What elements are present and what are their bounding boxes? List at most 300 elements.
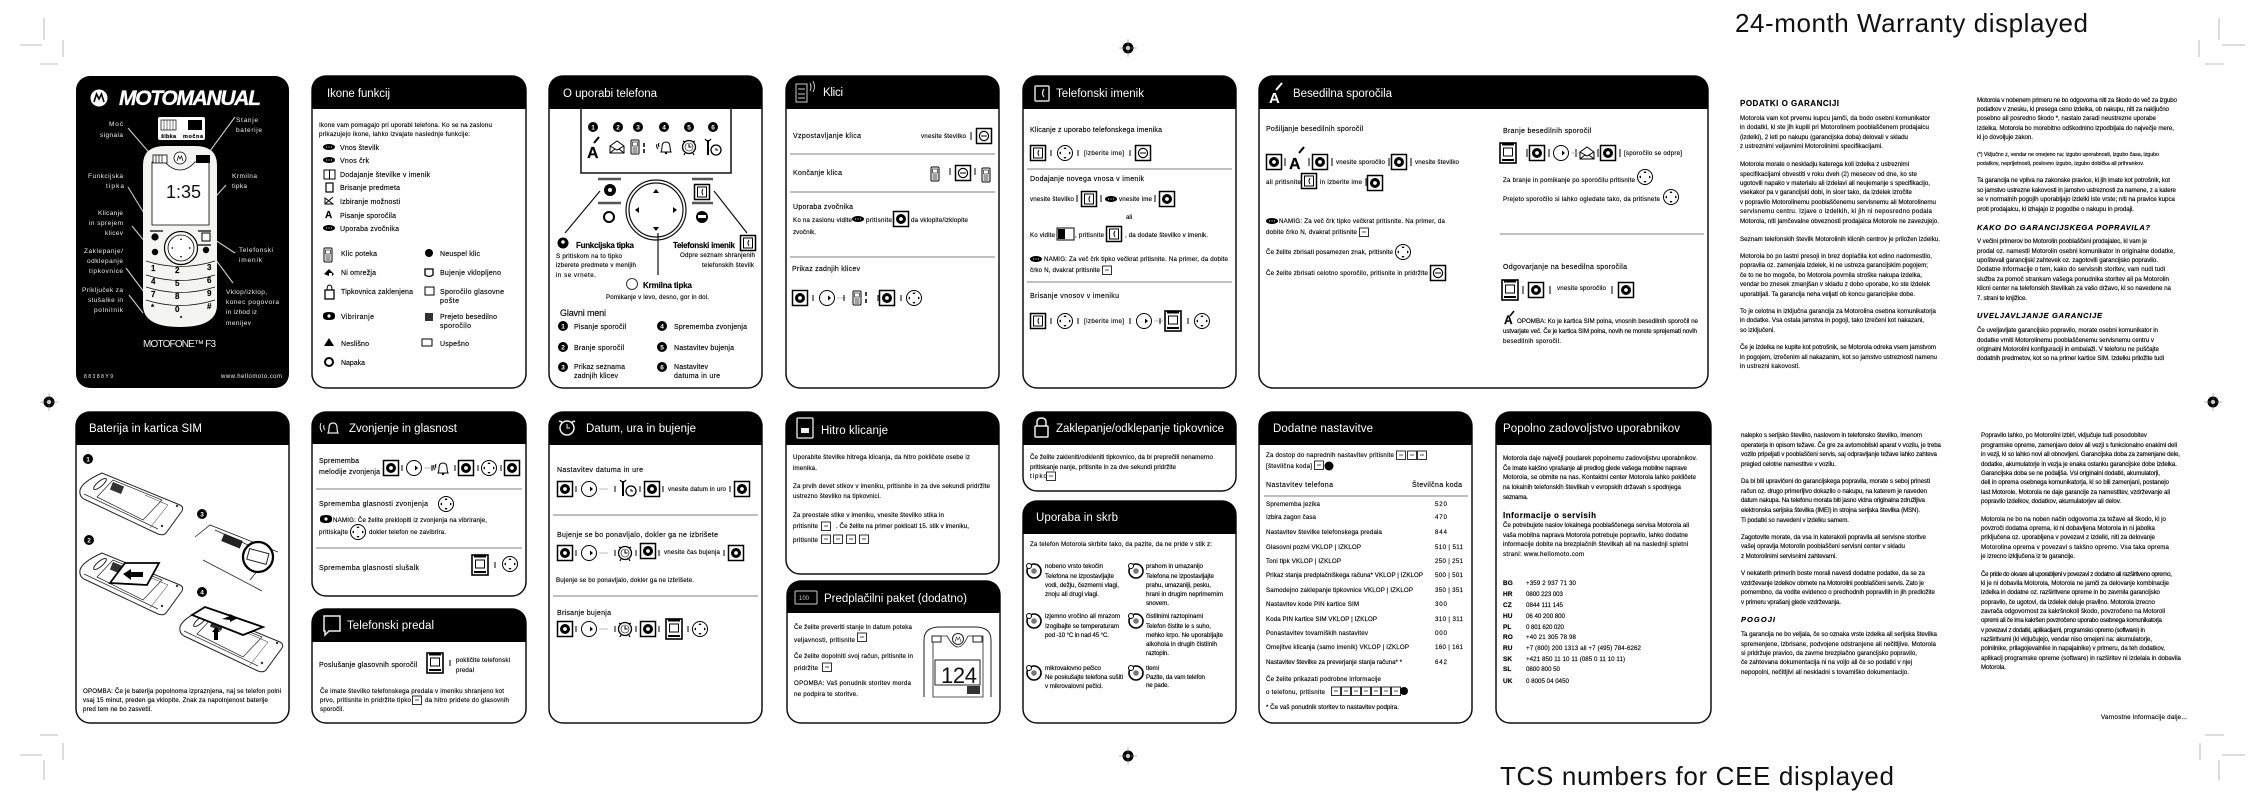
status icons: Ni omrežja [341, 270, 376, 277]
phone number list: 0800 800 50 [1526, 666, 1561, 673]
row: speaker: da vklopite/izklopite [911, 217, 969, 224]
callout labels: konec pogovora [226, 299, 279, 306]
icon list: Dodajanje številke v imenik [340, 172, 430, 179]
warranty text, third column [1741, 432, 1942, 676]
instructions: Za prvih devet stikov v imeniku, pritisnite in za dve sekundi pridržite [793, 483, 991, 490]
Glavni meni: zadnjih klicev [574, 373, 618, 380]
warranty text, fourth column: Popravilo lahko, po Motorolini izbiri, vključuje tudi posodobitev [1981, 432, 2148, 439]
row: alarm: Bujenje se bo ponavljalo, dokler ga ne izbrišete [557, 532, 718, 539]
row: recent calls: Prikaz zadnjih klicev [792, 266, 860, 273]
key descriptions: in se vrnete. [556, 272, 596, 279]
icon list: Brisanje predmeta [340, 185, 400, 192]
phone number list: RU [1503, 645, 1513, 652]
warning: OPOMBA: Če je baterija popolnoma izpraznjena, naj se telefon polni [83, 688, 281, 695]
row: add entry: Ko vidite [1030, 232, 1056, 239]
warning items right: čistilnimi raztopinami [1146, 613, 1203, 620]
phone illustration: 7 [151, 290, 156, 299]
instructions: pritisnite [793, 523, 819, 530]
warranty text, first column: Motorola, niti jamčevalne obveznosti prodajalca Motorole ne zavezujejo. [1740, 218, 1939, 225]
footer: 88388Y9 [84, 374, 113, 380]
row: speaker: pritisnite [866, 217, 893, 224]
row: ring volume: Sprememba glasnosti zvonjenja [319, 501, 428, 508]
phone number list: 0 801 620 020 [1526, 624, 1565, 631]
warranty text, fourth column: v povezavi z dodatki, aplikacijami, programsko opremo (software) in [1981, 627, 2146, 634]
row: ring volume [319, 496, 487, 540]
icon: bell [320, 423, 338, 433]
settings table: 642 [1435, 659, 1448, 666]
Glavni meni: Pisanje sporočil [574, 324, 626, 331]
Glavni meni: Prikaz seznama [574, 364, 625, 371]
block: tips: Če želite zbrisati celotno sporočilo, pritisnite in pridržite [1266, 270, 1429, 277]
phone illustration: 4 [151, 277, 156, 286]
intro [319, 122, 493, 138]
warranty text, first column: so izključeni. [1740, 327, 1775, 334]
block: reading: Prejeto sporočilo si lahko ogledate tako, da pritisnete [1503, 196, 1661, 203]
intro: na lokalnih telefonskih številkah v evropskih državah s spodnjega [1503, 484, 1682, 491]
warranty text, second column: dodatke vrniti Motorolinemu pooblaščenemu servisnemu centru v [1977, 337, 2155, 344]
intro [1503, 455, 1697, 501]
voicemail text: Poslušanje glasovnih sporočil [319, 662, 417, 669]
Glavni meni: 4 [660, 324, 664, 330]
phone number list: 0 8005 04 0450 [1526, 678, 1570, 685]
row: add entry: NAMIG: Za več črk tipko večkrat pritisnite. Na primer, da dobite [1044, 256, 1229, 263]
callout labels: in sprejem [89, 220, 123, 227]
navigation keypad [565, 179, 747, 275]
settings table: 500 | 501 [1435, 572, 1464, 579]
row: placing a call: vnesite številko [921, 133, 967, 140]
warranty text, second column: dodatnih predmetov, kot so na primer kartice SIM. Izdelku priložite tudi [1977, 355, 2164, 362]
warranty text, fourth column: ki je ni dobavila Motorola, Motorola ne jamči za delovanje kombinacije [1981, 580, 2170, 587]
icon: phone ringing [796, 81, 814, 102]
warranty text, fourth column: popravilo izdelkov, dodatkov, akumulatorjev ali delov. [1981, 498, 2121, 505]
warning items right: mehko krpo. Ne uporabljajte [1146, 632, 1224, 639]
phone number list: +7 (800) 200 1313 ali +7 (495) 784-6262 [1526, 645, 1642, 652]
Glavni meni: Nastavitev bujenja [674, 345, 734, 352]
phone illustration: 8 [175, 292, 180, 301]
row: delete alarm [557, 610, 708, 639]
warranty text, fourth column: Če pride do okvare ali uporabljeni v povezavi z dodatno ali razširitveno opremo, [1981, 571, 2172, 578]
status icons: Uspešno [440, 341, 469, 348]
row: recent calls [792, 266, 922, 306]
warranty text, fourth column: dodatke, akumulatorje in vezja je enaka ostanku garancijske dobe izdelka. [1981, 461, 2177, 468]
warranty text, second column: izdelka. Motorola bo morebitno odškodnino izpodbijala do največje mere, [1977, 125, 2174, 132]
block: reading [1500, 128, 1682, 204]
warranty text, fourth column: zavrača odgovornost za kakršnokoli škodo, povzročeno na Motoroli [1981, 608, 2165, 615]
icon list [323, 144, 430, 233]
warranty text, third column: nepopolni, nečitljivi ali neskladni s tovarniško dokumentacijo. [1741, 669, 1909, 676]
phone number list: SK [1503, 656, 1512, 663]
key descriptions: Telefonski imenik [673, 241, 736, 250]
block: tips: Če želite zbrisati posamezen znak, pritisnite [1266, 249, 1394, 256]
heading: Dodatne nastavitve [1273, 423, 1373, 435]
warning [83, 688, 281, 713]
warranty text, third column: Ta garancija ne bo veljala, če so oznaka vrste izdelka ali serijska številka [1741, 631, 1938, 638]
warranty text, fourth column: Motorola ne bo na noben način odgovorna za težave ali škodo, ki jo [1981, 516, 2167, 523]
warning items right [1128, 563, 1224, 689]
settings table: 000 [1435, 630, 1448, 637]
warning items right: ne pade. [1146, 682, 1169, 689]
key descriptions: Odpre seznam shranjenih [680, 252, 756, 259]
warranty text, third column: če zahtevana dokumentacija ni na voljo ali če so podatki v njej [1741, 659, 1912, 666]
heading: Datum, ura in bujenje [586, 423, 696, 435]
Glavni meni: 1 [561, 324, 565, 330]
leader lines [126, 117, 235, 313]
icon list: Vnos številk [340, 145, 380, 152]
heading: Uporaba in skrb [1036, 512, 1118, 524]
warranty text, third column: spremenjene, izbrisane, podvojene odstranjene ali nečitljive. Motorola [1741, 641, 1937, 648]
warranty text, second column: podatkov v znesku, ki presega ceno izdelka, ob nakupu, niti za naključno [1977, 106, 2170, 113]
warranty text, first column: v popravilo Motorolinemu pooblaščenemu servisnemu ali Motorolinemu [1740, 199, 1937, 206]
menu screen: 3 [636, 124, 640, 132]
panel: Telefonski imenik [1023, 76, 1236, 388]
warning items left: znoju ali drugi vlagi. [1045, 591, 1099, 598]
warranty text, fourth column: povzroči dodatna oprema, ki ni dobavljena Motorola in ni jabolka [1981, 525, 2156, 532]
warranty text, first column: PODATKI O GARANCIJI [1740, 99, 1839, 108]
row: placing a call: Vzpostavljanje klica [793, 133, 861, 140]
warranty text, second column: Ta garancija ne vpliva na zakonske pravice, ki jih imate kot potrošnik, kot [1977, 177, 2170, 184]
callout labels: baterije [236, 127, 262, 134]
callout labels: klicev [105, 230, 124, 237]
settings table: Omejitve klicanja (samo imenik) VKLOP | IZKLOP [1266, 644, 1409, 651]
warning: vsaj 15 minut, preden ga vklopite. Znak za napolnjenost baterije [83, 697, 269, 704]
warning items right: Pazite, da vam telefon [1146, 674, 1206, 681]
details footer: Če želite prikazati podrobne informacije [1266, 676, 1382, 683]
warranty text, first column: vendar bo znesek zmanjšan v skladu z dobo uporabe, ko ste izdelek [1740, 281, 1931, 288]
menu screen: 4 [662, 124, 666, 132]
Glavni meni [558, 308, 747, 380]
callout labels: Funkcijska [88, 173, 123, 180]
settings table: 300 [1435, 601, 1448, 608]
warranty text, second column: posebno ali posredno škodo *, nastalo zaradi neustrezne uporabe [1977, 115, 2157, 122]
step illustrations: 4 [200, 590, 204, 596]
phone illustration: 3 [207, 263, 212, 272]
heading: Popolno zadovoljstvo uporabnikov [1503, 423, 1680, 435]
status icons: Vibriranje [341, 314, 374, 321]
warranty text, first column: Motorola vam kot prvemu kupcu jamči, da bodo osebni komunikator [1740, 115, 1930, 122]
voicemail text: pokličite telefonski [456, 657, 510, 664]
Glavni meni: datuma in ure [674, 373, 720, 380]
instructions [793, 454, 991, 544]
block: tips [1266, 218, 1446, 280]
settings table: Prikaz stanja predplačniškega računa* VKLOP | IZKLOP [1266, 572, 1423, 579]
service info: strani: www.hellomoto.com [1503, 551, 1584, 558]
warranty text, third column: vašej opravlja Motorolin pooblaščeni servisni center v skladu [1741, 543, 1906, 550]
warranty text, second column: so jamstvo ustrezne kakovosti in jamstvo ustreznosti za namene, z a katere [1977, 187, 2177, 194]
row: delete entry: Brisanje vnosov v imeniku [1030, 293, 1119, 300]
footer: www.hellomoto.com [220, 374, 282, 380]
key descriptions: Krmilna tipka [643, 281, 693, 290]
settings table: Sprememba jezika [1266, 501, 1321, 508]
callout labels: in izhod iz [226, 309, 257, 316]
icon: letter A with pen [1269, 83, 1282, 107]
icon list: Uporaba zvočnika [340, 226, 399, 233]
settings table: Številčna koda [1412, 480, 1462, 489]
Glavni meni: Branje sporočil [574, 345, 624, 352]
warning items left [1026, 563, 1123, 690]
menu screen [581, 109, 731, 173]
block: sending: Pošiljanje besedilnih sporočil [1266, 126, 1363, 133]
warning items left: nobeno vrsto tekočin [1045, 563, 1104, 570]
row: add entry: ali [1126, 214, 1132, 221]
instructions: Uporabite številke hitrega klicanja, da hitro pokličete osebe iz [793, 454, 970, 461]
warning items left: izjemno vročino ali mrazom [1045, 613, 1120, 620]
phone number list [1503, 580, 1642, 685]
intro: Ikone vam pomagajo pri uporabi telefona. Ko se na zaslonu [319, 122, 493, 129]
warranty text, first column: z ustreznimi veljavnimi Motorolinimi specifikacijami. [1740, 143, 1883, 150]
warranty text, fourth column: deli in oprema osebnega komunikatorja, ki so bili zamenjani, postanejo [1981, 479, 2170, 486]
icon: speech bubble [324, 616, 340, 635]
status icons: Neuspel klic [440, 251, 480, 258]
block: sending: vnesite sporočilo [1336, 159, 1386, 166]
phone display illustration [924, 627, 991, 697]
callout labels [82, 117, 279, 327]
Glavni meni: 3 [561, 364, 565, 372]
footer [84, 374, 282, 380]
row: ringtone: Sprememba [319, 458, 359, 465]
callout labels: tipka [232, 183, 247, 190]
phone number list: SL [1503, 666, 1511, 673]
step illustrations: 2 [87, 538, 91, 544]
block: sending: vnesite številko [1415, 159, 1460, 166]
phone illustration: 9 [207, 289, 212, 298]
phone illustration: 0 [175, 305, 180, 314]
step illustrations: 3 [200, 512, 204, 518]
details footer [1266, 676, 1408, 711]
row: speaker [793, 204, 969, 236]
settings table: 250 | 251 [1435, 558, 1464, 565]
warranty text, fourth column: Garancijska doba se ne podaljša. Vsi originalni dodatki, akumulatorji, [1981, 470, 2160, 477]
icon list: Izbiranje možnosti [340, 199, 400, 206]
block: sending [1266, 126, 1460, 190]
icon list: Pisanje sporočila [340, 213, 396, 220]
status icons: Bujenje vklopljeno [440, 270, 501, 277]
block: reading: Branje besedilnih sporočil [1503, 128, 1591, 135]
callout labels: polnilnik [94, 307, 124, 314]
warranty text, second column: Dodatne informacije o tem, kako do servisnih storitev, vam nudi tudi [1977, 266, 2165, 273]
intro: Motorola daje največji poudarek popolnemu zadovoljstvu uporabnikov. [1503, 455, 1697, 462]
warranty text, second column: V večini primerov bo Motorolin pooblaščeni prodajalec, ki vam je [1977, 238, 2148, 245]
warranty text, fourth column: je izrecno izključena iz te garancije. [1980, 553, 2075, 560]
panel: Datum, ura in bujenje [549, 412, 762, 723]
callout labels: Stanje [236, 117, 258, 124]
warning items right: snovem. [1146, 600, 1169, 607]
warranty text, second column: služba za pomoč strankam vašega ponudnika storitev ali pa Motorolin [1977, 276, 2170, 283]
warranty text, first column: Če je izdelka ne kupite kot potrošnik, se Motorola odreka vsem jamstvom [1740, 344, 1936, 351]
settings table: 310 | 311 [1435, 616, 1464, 623]
instructions [794, 624, 914, 698]
callout labels: Vklop/izklop, [226, 289, 267, 296]
voicemail text: predal [456, 667, 474, 674]
warranty text, first column: če to ne bo mogoče, bo Motorola povrnila stroške nakupa izdelka, [1740, 272, 1922, 279]
warning items left: Telefona ne izpostavljajte [1045, 573, 1115, 580]
settings table: Samodejno zaklepanje tipkovnice VKLOP | IZKLOP [1266, 587, 1413, 594]
row: ending a call [793, 166, 990, 182]
block: replying: besedilnih sporočil. [1503, 338, 1561, 345]
step illustrations [80, 454, 283, 672]
warranty text, third column: operaterja in opisom težave. Če gre za avtomobilski aparat v vozilu, je treba [1741, 442, 1942, 449]
instructions: tipko [1030, 473, 1048, 480]
warranty text, third column: si pridržuje pravico, da zavrne brezplačno garancijsko popravilo, [1741, 650, 1917, 657]
settings table: 510 | 511 [1435, 544, 1464, 551]
phone illustration: * [151, 303, 155, 312]
block: replying: vnesite sporočilo [1557, 285, 1607, 292]
phone number list: 06 40 200 800 [1526, 613, 1566, 620]
heading: Telefonski imenik [1056, 88, 1144, 100]
heading: Predplačilni paket (dodatno) [824, 593, 967, 605]
row: ringtone [319, 458, 520, 476]
warranty text, fourth column: last Motorole. Motorola ne daje garancije za namestitev, vzdrževanje ali [1981, 489, 2170, 496]
warranty text, third column: Ti podatki so navedeni v izdelku samem. [1741, 517, 1849, 524]
panel: O uporabi telefona [549, 76, 762, 388]
row: alarm: Bujenje se bo ponavljalo, dokler ga ne izbrišete. [556, 577, 694, 584]
panel: Telefonski predal [312, 609, 526, 723]
row: delete alarm: Brisanje bujenja [557, 610, 611, 617]
settings table: Toni tipk VKLOP | IZKLOP [1266, 558, 1341, 565]
phone number list: HR [1503, 591, 1513, 598]
phone display illustration: 124 [941, 663, 977, 688]
warning items right: prahu, umazaniji, pesku, [1146, 582, 1211, 589]
warning items right: tlemi [1146, 665, 1159, 672]
phone number list: 0844 111 145 [1526, 602, 1564, 609]
warning items left: v mikrovalovni pečici. [1045, 683, 1103, 690]
panel: Zaklepanje/odklepanje tipkovnice [1023, 412, 1236, 491]
warranty text, third column: z Motorolinimi servisnimi zahtevami. [1741, 553, 1837, 560]
menu screen: 2 [616, 124, 620, 132]
warranty text, third column: vzdrževanje izdelkov obrnete na Motorolini pooblaščeni servis. Zato je [1741, 580, 1925, 587]
warranty text, first column: in dodatke. Vsa ostala jamstva in pogoji, tako izrečeni kot nakazani, [1740, 317, 1924, 324]
settings table: 160 | 161 [1435, 644, 1464, 651]
warranty text, second column [1977, 97, 2178, 362]
phone number list: RO [1503, 634, 1513, 641]
Glavni meni: Glavni meni [560, 308, 606, 318]
warranty text, fourth column: programske opreme, zamenjavo delov ali vezji s funkcionalno enakimi deli [1981, 442, 2177, 449]
instructions: imenika. [793, 465, 817, 472]
warning items right: Telefona ne izpostavljajte [1146, 573, 1215, 580]
warranty text, second column: Če uveljavljate garancijsko popravilo, morate osebni komunikator in [1977, 327, 2159, 334]
phone illustration: 1:35 [166, 182, 201, 202]
warning items left: vodi, dežju, čezmerni vlagi, [1045, 582, 1119, 589]
settings table: Nastavitev telefona [1266, 482, 1333, 489]
callout labels: odklepanje [87, 258, 123, 265]
status icons [323, 248, 504, 367]
service info: Informacije o servisih [1503, 511, 1596, 520]
row: add entry: vnesite številko [1030, 196, 1075, 203]
key descriptions: Pomikanje v levo, desno, gor in dol. [606, 294, 709, 301]
settings table: Izbira zagon časa [1266, 514, 1317, 521]
top annotation: warranty: 24-month Warranty displayed [1735, 8, 2088, 38]
block: tips: NAMIG: Za več črk tipko večkrat pritisnite. Na primer, da [1279, 218, 1446, 225]
panel: Dodatne nastavitve [1259, 412, 1472, 723]
panel: MOTOMANUAL cover [76, 76, 289, 388]
settings table: Glasovni pozivi VKLOP | IZKLOP [1266, 544, 1361, 551]
settings table: 844 [1435, 529, 1448, 536]
row: ring volume: dokler telefon ne zavibrira. [369, 529, 446, 536]
phone illustration: # [207, 302, 212, 311]
block: reading: Za branje in pomikanje po sporočilu pritisnite [1503, 177, 1636, 184]
phone number list: +359 2 937 71 30 [1526, 580, 1577, 587]
block: tips: dobite črko N, dvakrat pritisnite [1266, 229, 1358, 236]
key descriptions [556, 236, 756, 301]
settings table: Nastavitev številke za preverjanje stanja računa* * [1266, 659, 1403, 666]
row: add entry: vnesite ime [1119, 196, 1153, 203]
warranty text, first column: Motorola bo po lastni presoji in brez doplačila kot edino nadomestilo, [1740, 253, 1932, 260]
key descriptions: telefonskih številk [702, 262, 755, 269]
phone illustration: 1 [151, 264, 156, 273]
warranty text, second column: upoštevali garancijski zahtevek oz. zagotovili garancijsko popravilo. [1977, 257, 2158, 264]
warning items right: alkohola in drugih čistilnih [1146, 641, 1218, 648]
row: alarm [556, 532, 744, 584]
warranty text, second column: KAKO DO GARANCIJSKEGA POPRAVILA? [1977, 223, 2150, 232]
instructions: ustrezno številko na tipkovnici. [793, 493, 881, 500]
icon: phone [797, 418, 813, 438]
instructions: . Če želite na primer poklicati 15. stik v imeniku, [836, 523, 969, 530]
warranty text, third column: elektronska serijska številka (IMEI) in strojna serijska številka (MSN). [1741, 507, 1920, 514]
warranty text, first column: in dodatki, ki ste jih kupili pri Motorolinem pooblaščenem prodajalcu [1740, 124, 1930, 131]
instructions: pritiskanje nanje, pritisnite in za dve sekundi pridržite [1030, 464, 1177, 471]
warranty text, third column: POGOJI [1741, 615, 1776, 624]
status icons: Klic poteka [341, 251, 377, 258]
row: delete entry [1030, 293, 1210, 331]
row: set date and time: Nastavitev datuma in ure [557, 467, 643, 474]
settings table: Koda PIN kartice SIM VKLOP | IZKLOP [1266, 616, 1377, 623]
panel: Baterija in kartica SIM [76, 412, 289, 723]
heading: Zaklepanje/odklepanje tipkovnice [1056, 423, 1224, 435]
row: set date and time: vnesite datum in uro [668, 486, 727, 493]
menu screen: 6 [711, 124, 715, 132]
status icons: pošte [440, 298, 459, 305]
warranty text, second column: UVELJAVLJANJE GARANCIJE [1977, 311, 2103, 320]
voicemail text: Če imate številko telefonskega predala v imeniku shranjeno kot [320, 688, 504, 695]
settings table: Nastavitev številke telefonskega predala [1266, 529, 1383, 536]
block: replying [1502, 264, 1699, 345]
warranty text, first column: uporabljali. Ta garancija neha veljati ob koncu garancijske dobe. [1740, 291, 1915, 298]
warranty text, third column: račun oz. drugo primerljivo dokazilo o nakupu, na katerem je naveden [1741, 488, 1928, 495]
warranty text, second column: ki jo dovoljuje zakon. [1977, 134, 2033, 141]
row: add entry [1030, 176, 1229, 274]
block: sending: in izberite ime [1320, 179, 1363, 186]
phone number list: 0800 223 003 [1526, 591, 1564, 598]
menu screen: 1 [591, 124, 595, 132]
warranty text, third column: nalepko s serijsko številko, naslovom in telefonsko številko, imenom [1741, 432, 1922, 439]
Glavni meni: 6 [660, 364, 664, 372]
service info: informacije dobite na brezplačnih številkah ali na naslednji spletni [1503, 541, 1688, 548]
callout labels: Priključek za [82, 287, 123, 294]
row: calling from phonebook: [izberite ime] [1084, 150, 1124, 157]
warranty text, fourth column: priključena oz. uporabljena v povezavi z izdelki, niti za delovanje [1981, 534, 2156, 541]
signal and battery legend [158, 117, 205, 140]
warranty text, first column [1740, 99, 1940, 370]
panel: Uporaba in skrb [1023, 501, 1236, 723]
phone illustration [143, 146, 217, 327]
warranty text, first column: vsekakor pa v garancijski dobi, in sicer tako, da izdelek izročite [1740, 189, 1913, 196]
instructions: pridržite [794, 665, 819, 672]
row: earpiece volume [319, 555, 518, 575]
row: delete entry: [izberite ime] [1084, 318, 1124, 325]
warranty text, third column: v primeru vprašanj glede vzdrževanja. [1741, 599, 1841, 606]
block: reading: [sporočilo se odpre] [1624, 150, 1682, 157]
settings table: Ponastavitev tovarniških nastavitev [1266, 630, 1369, 637]
status icons: Sporočilo glasovne [440, 289, 504, 296]
icon: letter A with pen: A [1269, 90, 1280, 107]
warranty text, second column: klicni center na telefonskih številkah za vašo državo, ki so navedene na [1977, 285, 2172, 292]
phone illustration: 5 [175, 279, 180, 288]
warranty text, third column: vozilo pripeljati v pooblaščeni servis, saj odpravljanje težave lahko zahteva [1741, 451, 1938, 458]
callout labels: imenik [239, 257, 263, 264]
row: add entry: , da dodate številko v imenik. [1125, 232, 1208, 239]
warranty text, second column: proti prodajalcu, ki izhajajo iz pogodbe o nakupu in prodaji. [1977, 206, 2134, 213]
row: speaker: Uporaba zvočnika [793, 204, 853, 211]
block: replying: ustvarjate več. Če je kartica SIM polna, novih ne morete sprejemati novih [1503, 328, 1698, 335]
